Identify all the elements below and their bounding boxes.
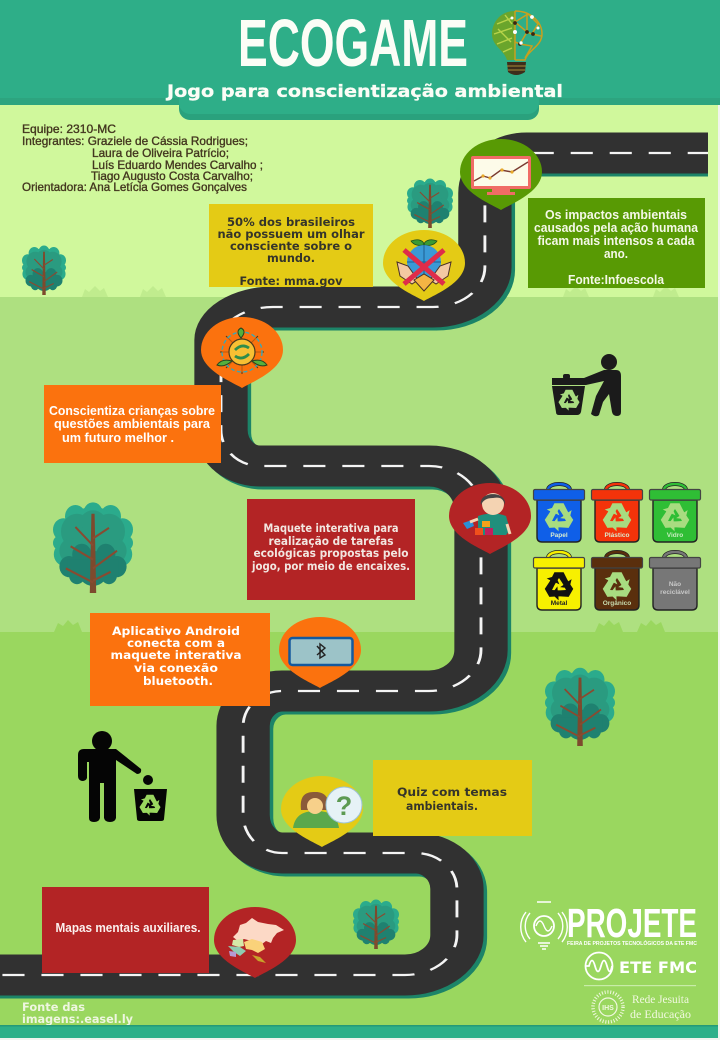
marker: yellow globe in hands bbox=[383, 230, 465, 301]
panel: 50% statistic: Fonte: mma.gov bbox=[240, 274, 343, 288]
panel: quiz: ambientais. bbox=[406, 799, 478, 813]
bin: paper bbox=[534, 484, 584, 542]
marker: bluetooth device bbox=[279, 617, 361, 688]
bin: non-recyclable: reciclável bbox=[660, 589, 690, 596]
tree 3 bbox=[53, 502, 133, 593]
panel: android app: via conexão bbox=[134, 661, 218, 675]
team text block: Integrantes: Graziele de Cássia Rodrigues; bbox=[22, 134, 248, 148]
image source note bbox=[22, 1000, 133, 1026]
panel: raises awareness: questões ambientais para bbox=[54, 416, 211, 431]
bin: plastic: Plástico bbox=[605, 532, 629, 539]
team text block bbox=[22, 122, 263, 194]
panel: quiz: Quiz com temas bbox=[397, 785, 507, 799]
bin: plastic bbox=[592, 484, 642, 542]
image source note: imagens:.easel.ly bbox=[22, 1012, 133, 1026]
marker: orange eco circle bbox=[201, 317, 283, 388]
logo: Rede Jesuita de Educação: IHS bbox=[602, 1005, 614, 1012]
title: ECOGAME bbox=[238, 6, 468, 81]
footer band bbox=[0, 1025, 718, 1038]
logo: PROJETE bbox=[521, 900, 697, 949]
panel: android app: Aplicativo Android bbox=[112, 624, 240, 638]
marker: Asia map bbox=[214, 907, 296, 978]
panel: environmental impacts: Os impactos ambientais bbox=[545, 207, 687, 222]
panel: 50% statistic: não possuem um olhar bbox=[218, 227, 365, 241]
winding road bbox=[0, 153, 713, 978]
bin: paper: Papel bbox=[550, 532, 568, 539]
panel: quiz bbox=[373, 760, 532, 836]
bin: glass bbox=[650, 484, 700, 542]
team text block: Luís Eduardo Mendes Carvalho ; bbox=[92, 158, 263, 172]
marker: green chart monitor bbox=[460, 139, 542, 210]
tree 4 bbox=[545, 668, 615, 746]
icon: person with recycling bin bbox=[552, 354, 621, 416]
panel: android app bbox=[90, 613, 270, 706]
panel: environmental impacts: ano. bbox=[604, 246, 628, 261]
panel: interactive model: Maquete interativa para bbox=[264, 521, 398, 535]
bin: non-recyclable bbox=[650, 552, 700, 610]
panel: 50% statistic bbox=[209, 204, 373, 288]
team text block: Laura de Oliveira Patrício; bbox=[92, 146, 229, 160]
bin: metal: Metal bbox=[551, 600, 567, 607]
panel: environmental impacts: Fonte:Infoescola bbox=[568, 272, 665, 287]
logo: Rede Jesuita de Educação: de Educação bbox=[630, 1009, 691, 1021]
tree 5 bbox=[353, 900, 399, 949]
panel: 50% statistic: mundo. bbox=[267, 251, 315, 265]
panel: environmental impacts: ficam mais intensos a cada bbox=[538, 233, 695, 248]
bin: organic bbox=[592, 552, 642, 610]
header band bbox=[0, 0, 720, 120]
bin: non-recyclable: Não bbox=[669, 581, 681, 588]
panel: interactive model: jogo, por meio de encaixes. bbox=[251, 559, 410, 573]
subtitle: Jogo para conscientização ambiental bbox=[166, 82, 563, 102]
panel: raises awareness: um futuro melhor . bbox=[62, 430, 174, 445]
panel: environmental impacts: causados pela ação humana bbox=[534, 220, 699, 235]
team text block: Orientadora: Ana Letícia Gomes Gonçalves bbox=[22, 180, 247, 194]
tree 2 bbox=[22, 246, 66, 295]
logo: ETE FMC bbox=[586, 952, 697, 980]
panel: interactive model: ecológicas propostas pelo bbox=[254, 546, 409, 560]
panel: 50% statistic: consciente sobre o bbox=[230, 239, 352, 253]
marker: child with blocks bbox=[449, 483, 531, 554]
panel: environmental impacts bbox=[528, 198, 705, 288]
logo: ETE FMC: ETE FMC bbox=[619, 958, 697, 977]
logo: PROJETE: FEIRA DE PROJETOS TECNOLÓGICOS DA ETE FMC bbox=[567, 939, 697, 947]
panel: interactive model bbox=[247, 499, 415, 600]
team text block: Equipe: 2310-MC bbox=[22, 122, 116, 136]
logo: Rede Jesuita de Educação bbox=[584, 985, 696, 1022]
icon: person throwing trash bbox=[78, 731, 167, 822]
panel: mind maps bbox=[42, 887, 209, 973]
marker: quiz woman bbox=[281, 776, 363, 847]
bin: organic: Orgânico bbox=[603, 600, 631, 607]
panel: raises awareness: Conscientiza crianças sobre bbox=[49, 403, 215, 418]
logo: Rede Jesuita de Educação: Rede Jesuita bbox=[632, 994, 689, 1006]
tree 1 bbox=[407, 179, 453, 228]
bin: glass: Vidro bbox=[667, 532, 683, 539]
icon: light bulb bbox=[492, 11, 542, 75]
panel: android app: conecta com a bbox=[127, 636, 225, 650]
panel: raises awareness bbox=[44, 385, 221, 463]
panel: 50% statistic: 50% dos brasileiros bbox=[227, 215, 355, 229]
panel: android app: maquete interativa bbox=[110, 648, 242, 662]
image source note: Fonte das bbox=[22, 1000, 85, 1014]
panel: interactive model: realização de tarefas bbox=[268, 534, 394, 548]
panel: android app: bluetooth. bbox=[143, 674, 213, 688]
recycling bins bbox=[534, 484, 700, 610]
team text block: Tiago Augusto Costa Carvalho; bbox=[91, 169, 253, 183]
marker: quiz woman: ? bbox=[336, 791, 352, 821]
panel: mind maps: Mapas mentais auxiliares. bbox=[56, 920, 200, 935]
bin: metal bbox=[534, 552, 584, 610]
